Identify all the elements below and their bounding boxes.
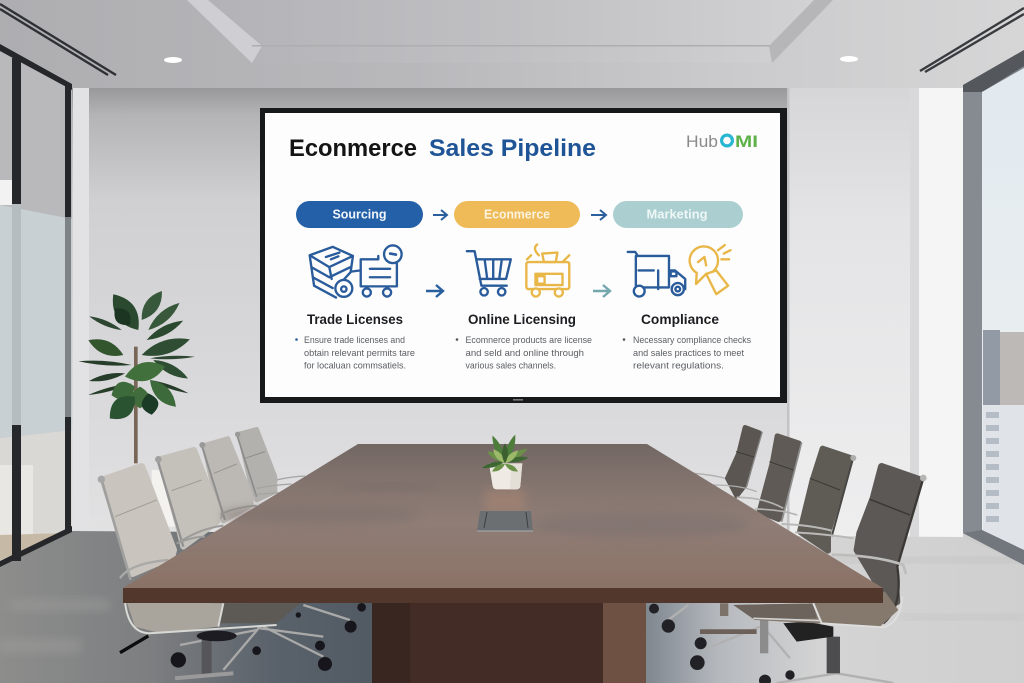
chairs right side [649, 427, 927, 683]
icon: key and light bulb [690, 245, 730, 294]
chair A [733, 467, 927, 627]
pill: Econmerce [454, 201, 580, 228]
logo: HubOMI: Hub [686, 133, 718, 151]
pill: Marketing [613, 201, 743, 228]
carpet floor [0, 531, 1024, 683]
bullet text: Necessary compliance checks [633, 335, 751, 346]
table edge [123, 588, 883, 603]
chair 4 [235, 429, 305, 500]
chair C [737, 436, 802, 522]
column: Compliance [623, 311, 751, 372]
bullet text [295, 335, 415, 372]
plant stem [134, 347, 138, 463]
bullet text: and seld and online through [466, 348, 584, 359]
icon: shopping cart [467, 251, 511, 296]
column: Trade Licenses [295, 311, 415, 372]
table top [123, 444, 883, 588]
table pedestal [372, 603, 646, 683]
wall-mounted display [260, 108, 787, 403]
plant leaves [78, 287, 195, 426]
glass partition left [0, 44, 72, 567]
logo: HubOMI: MI [735, 133, 758, 151]
ceiling vent left [0, 4, 116, 75]
chairs left side [98, 429, 366, 678]
title: Econmerce [289, 135, 417, 162]
ceiling [0, 0, 1024, 90]
chair 1 [98, 467, 300, 633]
arrow [591, 210, 606, 220]
bullet text [456, 335, 592, 372]
heading: Online Licensing [468, 311, 576, 327]
pill: Sourcing [296, 201, 423, 228]
icon: delivery truck [628, 252, 685, 297]
pill: Sourcing: Sourcing [332, 208, 386, 222]
table plant [481, 433, 529, 489]
title: Sales Pipeline [429, 135, 596, 162]
bullet text: and sales practices to meet [633, 348, 744, 359]
window right [963, 50, 1024, 565]
icon: stacked boxes [310, 247, 353, 298]
chair 3 [199, 439, 257, 522]
display brand mark [513, 399, 523, 401]
plant pot [152, 470, 178, 527]
conference table [123, 433, 883, 683]
city buildings [983, 330, 1024, 550]
chair D [693, 427, 762, 496]
bullet text: for localuan commsatiels. [304, 360, 406, 372]
pill: Marketing: Marketing [646, 208, 708, 222]
glass frame [0, 44, 72, 567]
chair 2 [155, 450, 223, 547]
arrow [426, 285, 443, 297]
ceiling light left [164, 57, 182, 63]
icon: parcel cart and clock [352, 245, 402, 297]
chair B [782, 449, 856, 551]
arrow [433, 210, 447, 220]
title [289, 135, 596, 162]
arrow [593, 285, 610, 297]
heading: Trade Licenses [307, 311, 403, 327]
ceiling vent right [920, 8, 1024, 72]
bullet text: Ensure trade licenses and [304, 335, 405, 346]
cable grommet [477, 511, 533, 531]
column: Online Licensing [456, 311, 592, 372]
bullet text: relevant regulations. [633, 360, 724, 372]
ceiling light right [840, 56, 858, 62]
bullet text: Ecomnerce products are license [466, 335, 592, 346]
bullet text: various sales channels. [466, 360, 556, 372]
pill: Econmerce: Econmerce [484, 208, 550, 222]
icon: yellow delivery cart [526, 244, 569, 297]
bullet text [623, 335, 751, 372]
chair bases [120, 603, 366, 678]
chair bases [649, 603, 893, 683]
pipeline icons [310, 244, 730, 298]
floor plant [78, 287, 195, 527]
bullet text: obtain relevant permits tare [304, 348, 415, 359]
back wall [72, 88, 963, 538]
heading: Compliance [641, 311, 719, 327]
logo: HubOMI [686, 133, 758, 151]
